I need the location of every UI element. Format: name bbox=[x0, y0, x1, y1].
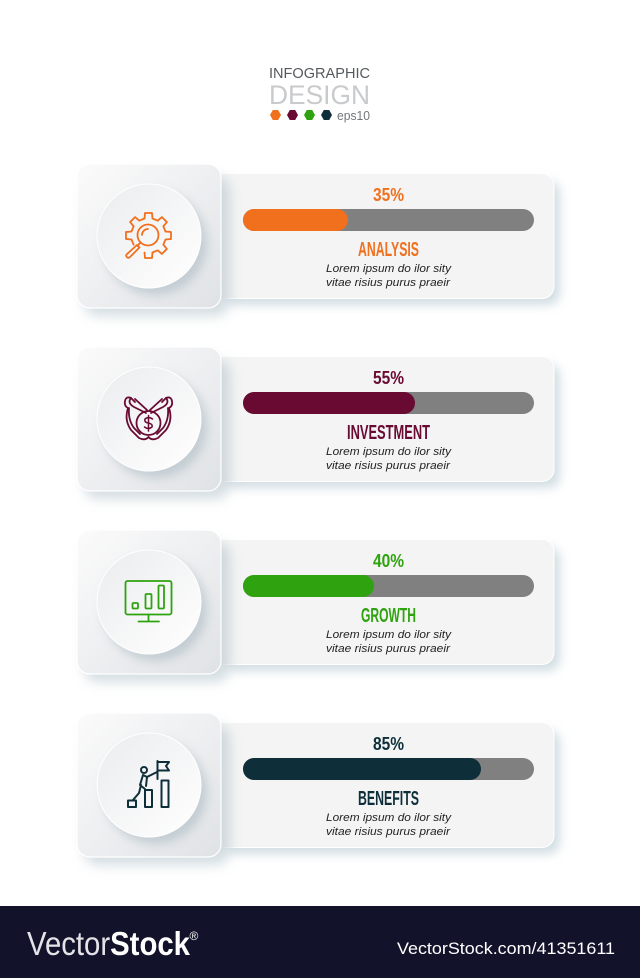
percent: 35% bbox=[373, 185, 404, 205]
tile shadow bbox=[84, 359, 230, 499]
icon circle bbox=[97, 550, 201, 654]
header line: design: DESIGN bbox=[269, 80, 370, 110]
icon tile bbox=[77, 530, 221, 674]
description: vitae risius purus praeir bbox=[326, 826, 451, 838]
circle shadow bbox=[103, 740, 207, 844]
icon circle bbox=[97, 184, 201, 288]
title: ANALYSIS bbox=[358, 238, 419, 261]
tile shadow bbox=[84, 542, 230, 682]
panel: analysis bbox=[77, 164, 560, 316]
header logo bbox=[269, 65, 370, 123]
panel: benefits bbox=[77, 713, 560, 865]
circle shadow bbox=[103, 191, 207, 295]
progress track bbox=[243, 575, 534, 597]
progress track bbox=[243, 758, 534, 780]
panel: growth bbox=[77, 530, 560, 682]
panel shadow bbox=[225, 730, 560, 854]
title: GROWTH bbox=[361, 604, 416, 627]
description bbox=[326, 263, 453, 289]
icon tile bbox=[77, 347, 221, 491]
description: Lorem ipsum do ilor sity bbox=[326, 629, 453, 641]
icon: gear and magnifier bbox=[126, 213, 171, 258]
info card bbox=[205, 356, 554, 482]
panel: investment bbox=[77, 347, 560, 499]
percent: 40% bbox=[373, 551, 404, 571]
progress fill bbox=[243, 209, 348, 231]
progress track bbox=[243, 209, 534, 231]
icon: monitor with bars bbox=[126, 581, 172, 622]
icon: hands holding coin bbox=[125, 397, 172, 439]
percent: 55% bbox=[373, 368, 404, 388]
colour dots bbox=[270, 110, 332, 120]
registered mark: ® bbox=[190, 929, 198, 943]
description: vitae risius purus praeir bbox=[326, 643, 451, 655]
description bbox=[326, 812, 453, 838]
icon tile bbox=[77, 164, 221, 308]
info card bbox=[205, 540, 554, 664]
description: vitae risius purus praeir bbox=[326, 277, 451, 289]
progress fill bbox=[243, 575, 374, 597]
tile shadow bbox=[84, 176, 230, 316]
panel shadow bbox=[225, 547, 560, 671]
icon: person climbing bars with flag bbox=[128, 761, 169, 807]
circle shadow bbox=[103, 374, 207, 478]
footer bar bbox=[0, 906, 640, 978]
description bbox=[326, 629, 453, 655]
title: INVESTMENT bbox=[347, 421, 430, 444]
tile shadow bbox=[84, 725, 230, 865]
progress fill bbox=[243, 392, 415, 414]
panel shadow bbox=[225, 364, 560, 488]
icon circle bbox=[97, 733, 201, 837]
title: BENEFITS bbox=[358, 787, 419, 810]
footer logo: VectorStock bbox=[27, 925, 191, 962]
progress fill bbox=[243, 758, 481, 780]
footer id: VectorStock.com/41351611 bbox=[397, 940, 615, 958]
description bbox=[326, 446, 453, 472]
circle shadow bbox=[103, 557, 207, 661]
description: Lorem ipsum do ilor sity bbox=[326, 812, 453, 824]
header line: infographic: INFOGRAPHIC bbox=[269, 65, 370, 82]
description: Lorem ipsum do ilor sity bbox=[326, 446, 453, 458]
info card bbox=[205, 174, 554, 298]
panel shadow bbox=[225, 181, 560, 305]
progress track bbox=[243, 392, 534, 414]
description: vitae risius purus praeir bbox=[326, 460, 451, 472]
description: Lorem ipsum do ilor sity bbox=[326, 263, 453, 275]
percent: 85% bbox=[373, 734, 404, 754]
icon circle bbox=[97, 367, 201, 471]
info card bbox=[205, 722, 554, 848]
icon tile bbox=[77, 713, 221, 857]
eps label: eps10 bbox=[337, 108, 370, 123]
